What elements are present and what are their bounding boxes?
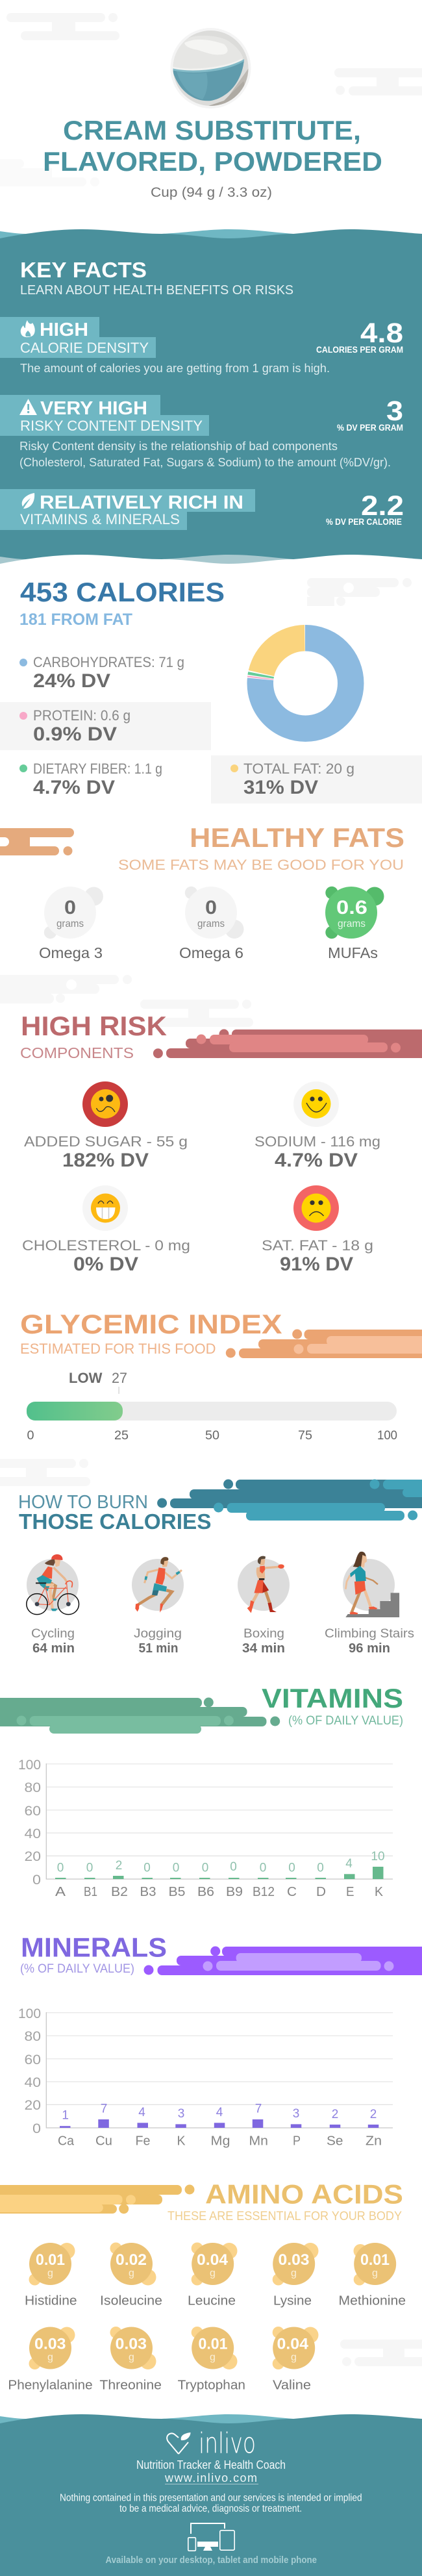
amino: histidine: 0.01	[36, 2251, 65, 2269]
legend: total fat: 31% DV	[243, 777, 318, 798]
bar chart: vitamins: B9	[226, 1885, 243, 1899]
bar chart: vitamins: 0	[57, 1862, 64, 1875]
activity: climbing stairs: 96 min	[349, 1641, 390, 1656]
availability note: Available on your desktop, tablet and mobile phone	[105, 2555, 317, 2566]
activity: jogging	[132, 1557, 184, 1656]
amino: phenylalanine: Phenylalanine	[8, 2378, 93, 2392]
legend: total fat	[211, 755, 422, 803]
amino: isoleucine: g	[129, 2268, 134, 2279]
heading: minerals: MINERALS	[21, 1932, 167, 1963]
bar chart: vitamins: B5	[169, 1885, 186, 1899]
decoration: orange bars	[0, 828, 74, 855]
decoration: red bars	[153, 1029, 422, 1058]
heading: key facts: KEY FACTS	[20, 258, 147, 282]
stat: MUFAs: MUFAs	[328, 944, 378, 961]
gauge value: 27	[112, 1370, 127, 1386]
bar chart: vitamins: 0	[260, 1862, 266, 1875]
amino: leucine: 0.04	[197, 2251, 229, 2269]
amino: isoleucine: 0.02	[116, 2251, 147, 2269]
activity: cycling: 64 min	[32, 1641, 75, 1656]
bar chart: vitamins: 60	[25, 1804, 41, 1819]
bar chart: minerals: 60	[25, 2052, 41, 2067]
callout: vitamins and minerals	[0, 489, 404, 530]
amino: lysine: Lysine	[273, 2293, 312, 2308]
heading: high risk: HIGH RISK	[21, 1011, 167, 1041]
item: added sugar: 182% DV	[62, 1150, 149, 1171]
amino: isoleucine	[100, 2242, 162, 2308]
bar chart: minerals: 7	[255, 2102, 262, 2116]
amino: tryptophan: g	[210, 2352, 216, 2363]
bar chart: minerals: 4	[138, 2106, 145, 2119]
activity: jogging: Jogging	[134, 1627, 182, 1641]
panel: calories	[0, 577, 422, 803]
panel: key facts	[0, 229, 422, 572]
bar chart: minerals: 2	[332, 2108, 338, 2121]
bar chart: vitamins: 2	[116, 1859, 122, 1873]
logo wordmark: inlivo	[199, 2427, 256, 2460]
stat: 2.2 % DV per calorie: % DV PER CALORIE	[326, 517, 402, 527]
activity: boxing: 34 min	[242, 1641, 285, 1656]
amino: lysine: 0.03	[278, 2251, 309, 2269]
website link: www.inlivo.com	[164, 2471, 257, 2484]
bar chart: minerals: 40	[25, 2075, 41, 2090]
amino: lysine	[273, 2243, 318, 2308]
panel: minerals	[18, 1932, 422, 2149]
item: added sugar	[24, 1081, 188, 1171]
bar chart: minerals: Zn	[366, 2134, 382, 2149]
callout: vitamins and minerals: RELATIVELY RICH IN	[40, 492, 243, 513]
amino: valine: g	[291, 2352, 297, 2363]
amino: histidine: g	[47, 2268, 53, 2279]
disclaimer: to be a medical advice, diagnosis or treatment.	[119, 2503, 302, 2514]
callout: calorie density: CALORIE DENSITY	[20, 340, 149, 356]
callout: risky content density: (Cholesterol, Saturated Fat, Sugars & Sodium) to the amount (%DV/gr).	[19, 456, 391, 469]
stat: MUFAs: 0.6	[336, 897, 367, 918]
item: saturated fat	[262, 1185, 373, 1275]
decoration: orange bars	[226, 1329, 422, 1358]
panel: healthy fats	[0, 822, 404, 961]
stat: 2.2 % DV per calorie: 2.2	[361, 490, 404, 522]
gauge axis	[27, 1429, 397, 1443]
bar chart: minerals: 20	[25, 2098, 41, 2113]
amino: methionine: Methionine	[339, 2293, 406, 2308]
stat: omega 3: grams	[56, 918, 84, 929]
item: sodium: 4.7% DV	[275, 1150, 358, 1171]
bar chart: vitamins: A	[55, 1885, 66, 1899]
panel: footer	[0, 2414, 422, 2576]
icon: leaf	[22, 493, 34, 509]
amino: histidine	[25, 2243, 77, 2308]
activity: boxing: Boxing	[243, 1627, 284, 1641]
panel: glycemic index	[20, 1309, 422, 1443]
amino: tryptophan: Tryptophan	[178, 2378, 245, 2392]
icon: devices	[188, 2523, 234, 2551]
legend: protein	[0, 702, 211, 750]
legend: protein: 0.9% DV	[33, 724, 117, 745]
amino: phenylalanine	[8, 2327, 93, 2392]
gauge bar	[27, 1402, 397, 1421]
stat: 3 % DV per gram: 3	[386, 396, 403, 427]
gauge axis: 100	[377, 1429, 397, 1443]
item: cholesterol	[22, 1185, 190, 1275]
stat: omega 3: 0	[64, 897, 76, 918]
bar chart: minerals: 3	[293, 2107, 299, 2121]
bar chart: vitamins: 4	[345, 1857, 353, 1871]
amino: methionine: g	[372, 2268, 378, 2279]
amino: threonine: g	[129, 2352, 134, 2363]
disclaimer: Nothing contained in this presentation and our services is intended or implied	[60, 2493, 362, 2504]
bar chart: vitamins: 0	[288, 1862, 295, 1875]
legend: carbohydrates	[19, 654, 184, 692]
bar chart: minerals: Se	[327, 2134, 343, 2149]
activity: cycling: Cycling	[31, 1627, 75, 1641]
tagline: Nutrition Tracker & Health Coach	[136, 2458, 286, 2471]
panel: vitamins	[0, 1683, 403, 1899]
title: FLAVORED, POWDERED	[43, 146, 382, 177]
bar chart: minerals: 80	[25, 2029, 41, 2044]
amino: valine: Valine	[273, 2378, 311, 2392]
bar chart: minerals: 100	[18, 2006, 41, 2021]
stat: omega 6: Omega 6	[179, 944, 243, 961]
gauge value	[69, 1370, 127, 1394]
stat: MUFAs: grams	[338, 918, 366, 929]
bar chart: vitamins: 0	[143, 1862, 151, 1875]
bar chart: vitamins: B6	[197, 1885, 214, 1899]
item: sodium	[254, 1081, 380, 1171]
bar chart: vitamins: 100	[18, 1758, 41, 1773]
bar chart: minerals: Fe	[135, 2134, 151, 2149]
heading: 453 calories: 453 CALORIES	[20, 577, 225, 607]
bar chart: vitamins: B1	[84, 1885, 97, 1899]
subheading: (% OF DAILY VALUE)	[20, 1962, 134, 1976]
bar chart: vitamins: C	[287, 1885, 297, 1899]
panel: how to burn calories	[18, 1480, 422, 1656]
callout: risky content density: VERY HIGH	[40, 398, 147, 419]
subheading: LEARN ABOUT HEALTH BENEFITS OR RISKS	[20, 283, 293, 297]
donut chart	[260, 638, 351, 729]
bar chart: vitamins: B2	[111, 1885, 128, 1899]
callout: vitamins and minerals: VITAMINS & MINERALS	[20, 511, 180, 527]
subheading: SOME FATS MAY BE GOOD FOR YOU	[118, 857, 404, 873]
amino: histidine: Histidine	[25, 2293, 77, 2308]
subheading: THESE ARE ESSENTIAL FOR YOUR BODY	[168, 2209, 402, 2223]
logo: inlivo heart	[167, 2432, 191, 2454]
bar chart: minerals: Cu	[95, 2134, 112, 2149]
bar chart: vitamins: E	[346, 1885, 354, 1899]
legend: carbohydrates: 24% DV	[33, 670, 110, 692]
gauge axis: 0	[27, 1429, 34, 1443]
stat: omega 3: Omega 3	[39, 944, 103, 961]
amino: threonine	[99, 2327, 162, 2392]
bar chart: minerals: 7	[101, 2102, 107, 2116]
bar chart: minerals: 4	[216, 2106, 223, 2119]
heading: how to burn: HOW TO BURN	[18, 1492, 148, 1513]
subheading: from fat: 181 FROM FAT	[19, 611, 132, 629]
bar chart: minerals: K	[177, 2134, 186, 2149]
gauge axis: 50	[205, 1429, 219, 1443]
bar chart: minerals: 3	[178, 2107, 184, 2121]
item: cholesterol: 0% DV	[73, 1254, 138, 1275]
amino: phenylalanine: 0.03	[34, 2336, 66, 2353]
stat: omega 6: 0	[205, 897, 217, 918]
bar chart: vitamins: 10	[371, 1850, 385, 1863]
stat: omega 6: grams	[197, 918, 225, 929]
callout: calorie density: The amount of calories you are getting from 1 gram is high.	[20, 362, 330, 375]
bar chart: vitamins: B12	[253, 1885, 275, 1899]
decoration: purple bars	[144, 1946, 422, 1975]
decoration: yellow bars	[0, 2185, 195, 2214]
stat: MUFAs	[325, 887, 384, 961]
heading: amino acids: AMINO ACIDS	[205, 2179, 403, 2210]
stat: omega 6	[179, 887, 244, 961]
stat: 4.8 calories per gram: CALORIES PER GRAM	[316, 345, 403, 355]
bar chart: vitamins: 20	[25, 1849, 41, 1864]
gauge axis: 25	[114, 1429, 129, 1443]
heading: vitamins: VITAMINS	[262, 1683, 403, 1713]
bar chart: vitamins: 0	[202, 1862, 208, 1875]
amino: leucine: g	[210, 2268, 216, 2279]
callout: risky content density	[0, 395, 403, 469]
amino: valine: 0.04	[277, 2336, 309, 2353]
bar chart: minerals: Mg	[210, 2134, 230, 2149]
amino: methionine: 0.01	[360, 2251, 390, 2269]
bar chart: vitamins: 80	[25, 1780, 41, 1795]
amino: tryptophan	[178, 2327, 245, 2392]
activity: climbing stairs: Climbing Stairs	[325, 1627, 414, 1641]
amino: leucine	[188, 2242, 238, 2308]
stat: 3 % DV per gram	[337, 396, 403, 433]
title: CREAM SUBSTITUTE,	[63, 115, 361, 145]
gauge axis: 75	[298, 1429, 312, 1443]
heading: glycemic index: GLYCEMIC INDEX	[20, 1309, 282, 1339]
bar chart: vitamins: 0	[86, 1862, 93, 1875]
stat: 4.8 calories per gram: 4.8	[360, 318, 403, 349]
bar chart: vitamins: K	[375, 1885, 384, 1899]
legend: total fat: TOTAL FAT: 20 g	[243, 761, 354, 777]
amino: tryptophan: 0.01	[199, 2336, 227, 2353]
bar chart: vitamins: D	[316, 1885, 326, 1899]
decoration: green bars	[0, 1698, 280, 1734]
activity: climbing stairs	[325, 1552, 414, 1656]
heading: those calories: THOSE CALORIES	[19, 1509, 212, 1534]
item: sodium: SODIUM - 116 mg	[254, 1133, 380, 1150]
amino: leucine: Leucine	[188, 2293, 236, 2308]
subheading: ESTIMATED FOR THIS FOOD	[20, 1341, 216, 1357]
bar chart: vitamins: B3	[140, 1885, 156, 1899]
stat: omega 3	[39, 887, 103, 961]
gauge value: LOW	[69, 1370, 103, 1386]
legend: carbohydrates: CARBOHYDRATES: 71 g	[33, 654, 184, 670]
bar chart: vitamins: 0	[32, 1873, 41, 1888]
stat: 3 % DV per gram: % DV PER GRAM	[337, 423, 403, 433]
legend: protein: PROTEIN: 0.6 g	[33, 707, 130, 724]
subheading: (% OF DAILY VALUE)	[288, 1713, 403, 1728]
bar chart: vitamins: 40	[25, 1826, 41, 1841]
item: cholesterol: CHOLESTEROL - 0 mg	[22, 1237, 190, 1254]
callout: risky content density: RISKY CONTENT DENSITY	[20, 418, 203, 434]
decoration: teal bars	[157, 1480, 422, 1521]
subheading: COMPONENTS	[20, 1044, 134, 1061]
stat: 2.2 % DV per calorie	[326, 490, 404, 527]
bar chart: vitamins: 0	[173, 1862, 179, 1875]
amino: valine	[273, 2327, 318, 2392]
heading: healthy fats: HEALTHY FATS	[190, 822, 404, 853]
serving size: Cup (94 g / 3.3 oz)	[151, 185, 272, 200]
amino: methionine	[339, 2243, 406, 2308]
bar chart: vitamins: 0	[230, 1860, 237, 1874]
callout: calorie density	[0, 317, 403, 375]
amino: threonine: Threonine	[99, 2378, 162, 2392]
bar chart: vitamins: 0	[317, 1862, 324, 1875]
bar chart: minerals: 2	[370, 2108, 377, 2121]
activity: cycling	[27, 1554, 79, 1656]
icon: warning triangle	[19, 399, 37, 415]
panel: high risk components	[20, 1011, 422, 1275]
amino: isoleucine: Isoleucine	[100, 2293, 162, 2308]
legend: dietary fiber	[19, 761, 162, 798]
disclaimer	[60, 2493, 362, 2514]
bar chart: minerals: P	[293, 2134, 301, 2149]
food photo: bowl of cream	[169, 26, 253, 110]
bar chart: minerals: 0	[32, 2121, 41, 2136]
stat: 4.8 calories per gram	[316, 318, 403, 355]
bar chart: minerals: 1	[62, 2109, 69, 2123]
bar chart: minerals: Ca	[58, 2134, 75, 2149]
item: saturated fat: SAT. FAT - 18 g	[262, 1237, 373, 1254]
legend: dietary fiber: 4.7% DV	[33, 777, 115, 798]
activity: jogging: 51 min	[139, 1641, 178, 1656]
callout: calorie density: HIGH	[40, 320, 88, 340]
bar chart: minerals	[18, 2006, 393, 2149]
bar chart: vitamins	[18, 1758, 393, 1899]
icon: flame	[21, 320, 35, 337]
item: added sugar: ADDED SUGAR - 55 g	[24, 1133, 188, 1150]
title	[43, 115, 382, 177]
item: saturated fat: 91% DV	[280, 1254, 353, 1275]
callout: risky content density: Risky Content density is the relationship of bad components	[19, 440, 338, 453]
bar chart: minerals: Mn	[249, 2134, 268, 2149]
amino: phenylalanine: g	[47, 2352, 53, 2363]
amino: threonine: 0.03	[116, 2336, 147, 2353]
activity: boxing	[238, 1556, 290, 1656]
amino: lysine: g	[291, 2268, 297, 2279]
panel: amino acids	[0, 2179, 406, 2392]
legend: dietary fiber: DIETARY FIBER: 1.1 g	[33, 761, 162, 777]
